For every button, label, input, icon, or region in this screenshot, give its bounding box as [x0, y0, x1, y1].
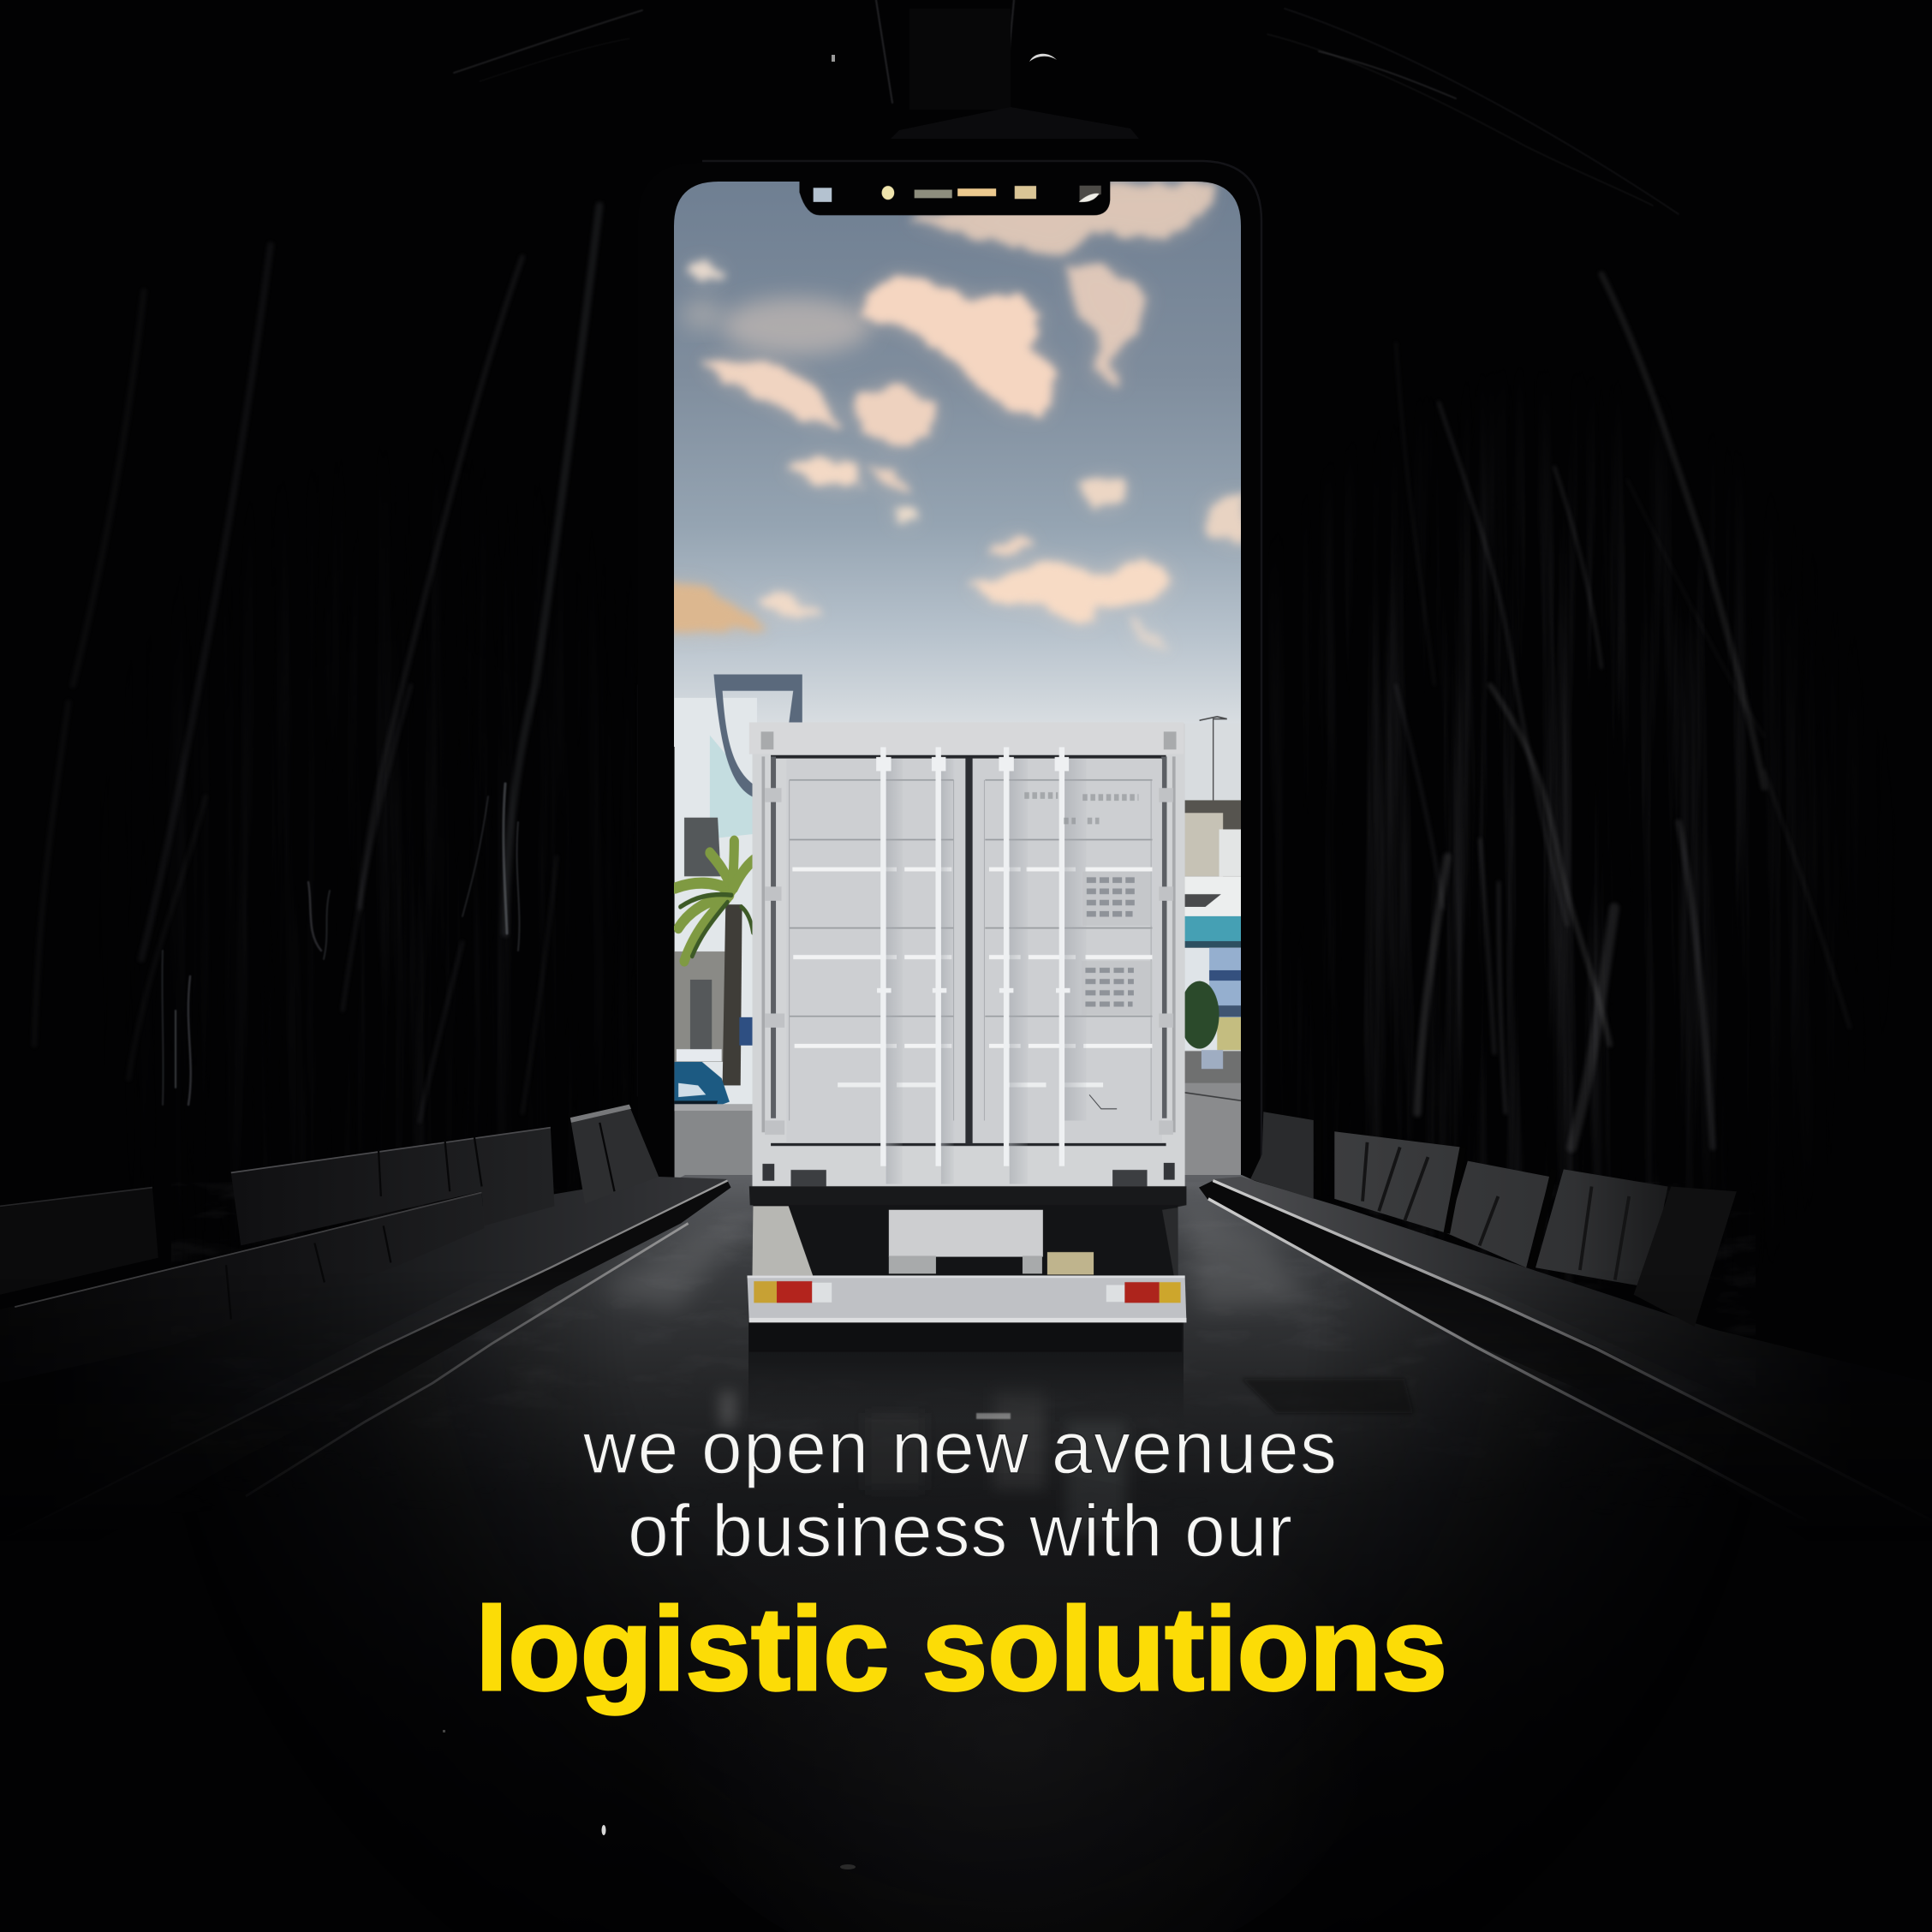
- ceiling arcs: [454, 0, 1679, 214]
- clouds: [666, 182, 1244, 651]
- underside: [749, 1322, 1182, 1351]
- truck: [748, 722, 1186, 1351]
- palm tree: [675, 841, 754, 1085]
- soft glow: [651, 1473, 1370, 1932]
- line two: of business with our: [628, 1490, 1292, 1572]
- right tree: [1185, 981, 1219, 1049]
- left buildings: [675, 698, 757, 1112]
- right sidewalk and barriers: [1199, 1112, 1932, 1541]
- right door: [973, 759, 1162, 1143]
- road surface: [187, 1175, 1670, 1906]
- headline: [475, 1407, 1447, 1715]
- right tail light: [1106, 1282, 1181, 1303]
- corner castings: [762, 1163, 1175, 1186]
- right buildings: [1178, 724, 1244, 803]
- left tail light: [754, 1281, 832, 1303]
- door seam: [965, 758, 973, 1144]
- window scene: [666, 177, 1244, 1182]
- curb face: [0, 1181, 731, 1541]
- curb face: [1199, 1181, 1932, 1541]
- road reflections: [719, 1387, 1126, 1533]
- reflection below truck: [748, 1322, 1184, 1422]
- road line: [246, 1224, 689, 1496]
- left door: [786, 759, 965, 1143]
- underride area: [752, 1205, 1178, 1277]
- blue car: [675, 1049, 730, 1107]
- curb highlight: [0, 1181, 728, 1541]
- sidewalk: [0, 1177, 728, 1541]
- container labels: [1024, 796, 1152, 1015]
- curb highlight: [1213, 1181, 1932, 1521]
- sky: [674, 182, 1241, 747]
- sidewalk: [1213, 1177, 1932, 1521]
- right road: [1185, 1082, 1241, 1175]
- street background: [675, 674, 1244, 1182]
- door hinges: [765, 788, 1173, 1135]
- line three: logistic solutions: [475, 1583, 1447, 1715]
- right curtain: [1365, 271, 1834, 1171]
- line one: we open new avenues: [582, 1407, 1337, 1489]
- chassis: [749, 1186, 1186, 1210]
- lock rods: [876, 747, 1070, 1166]
- window frame outline: [638, 161, 1261, 1182]
- left curtain: [139, 202, 603, 1125]
- bumper: [748, 1276, 1186, 1322]
- left sidewalk and barriers: [0, 1105, 731, 1541]
- barriers: [1250, 1112, 1737, 1327]
- camera notch: [800, 182, 1110, 216]
- corrugation: [790, 780, 1152, 1120]
- road line: [1208, 1199, 1807, 1521]
- container body: [749, 722, 1185, 1186]
- shadow strips: [886, 759, 1086, 1184]
- barriers: [0, 1105, 659, 1383]
- distant ceiling structure: [832, 9, 1139, 139]
- bottom specks: [443, 1730, 856, 1869]
- left road: [675, 1104, 757, 1179]
